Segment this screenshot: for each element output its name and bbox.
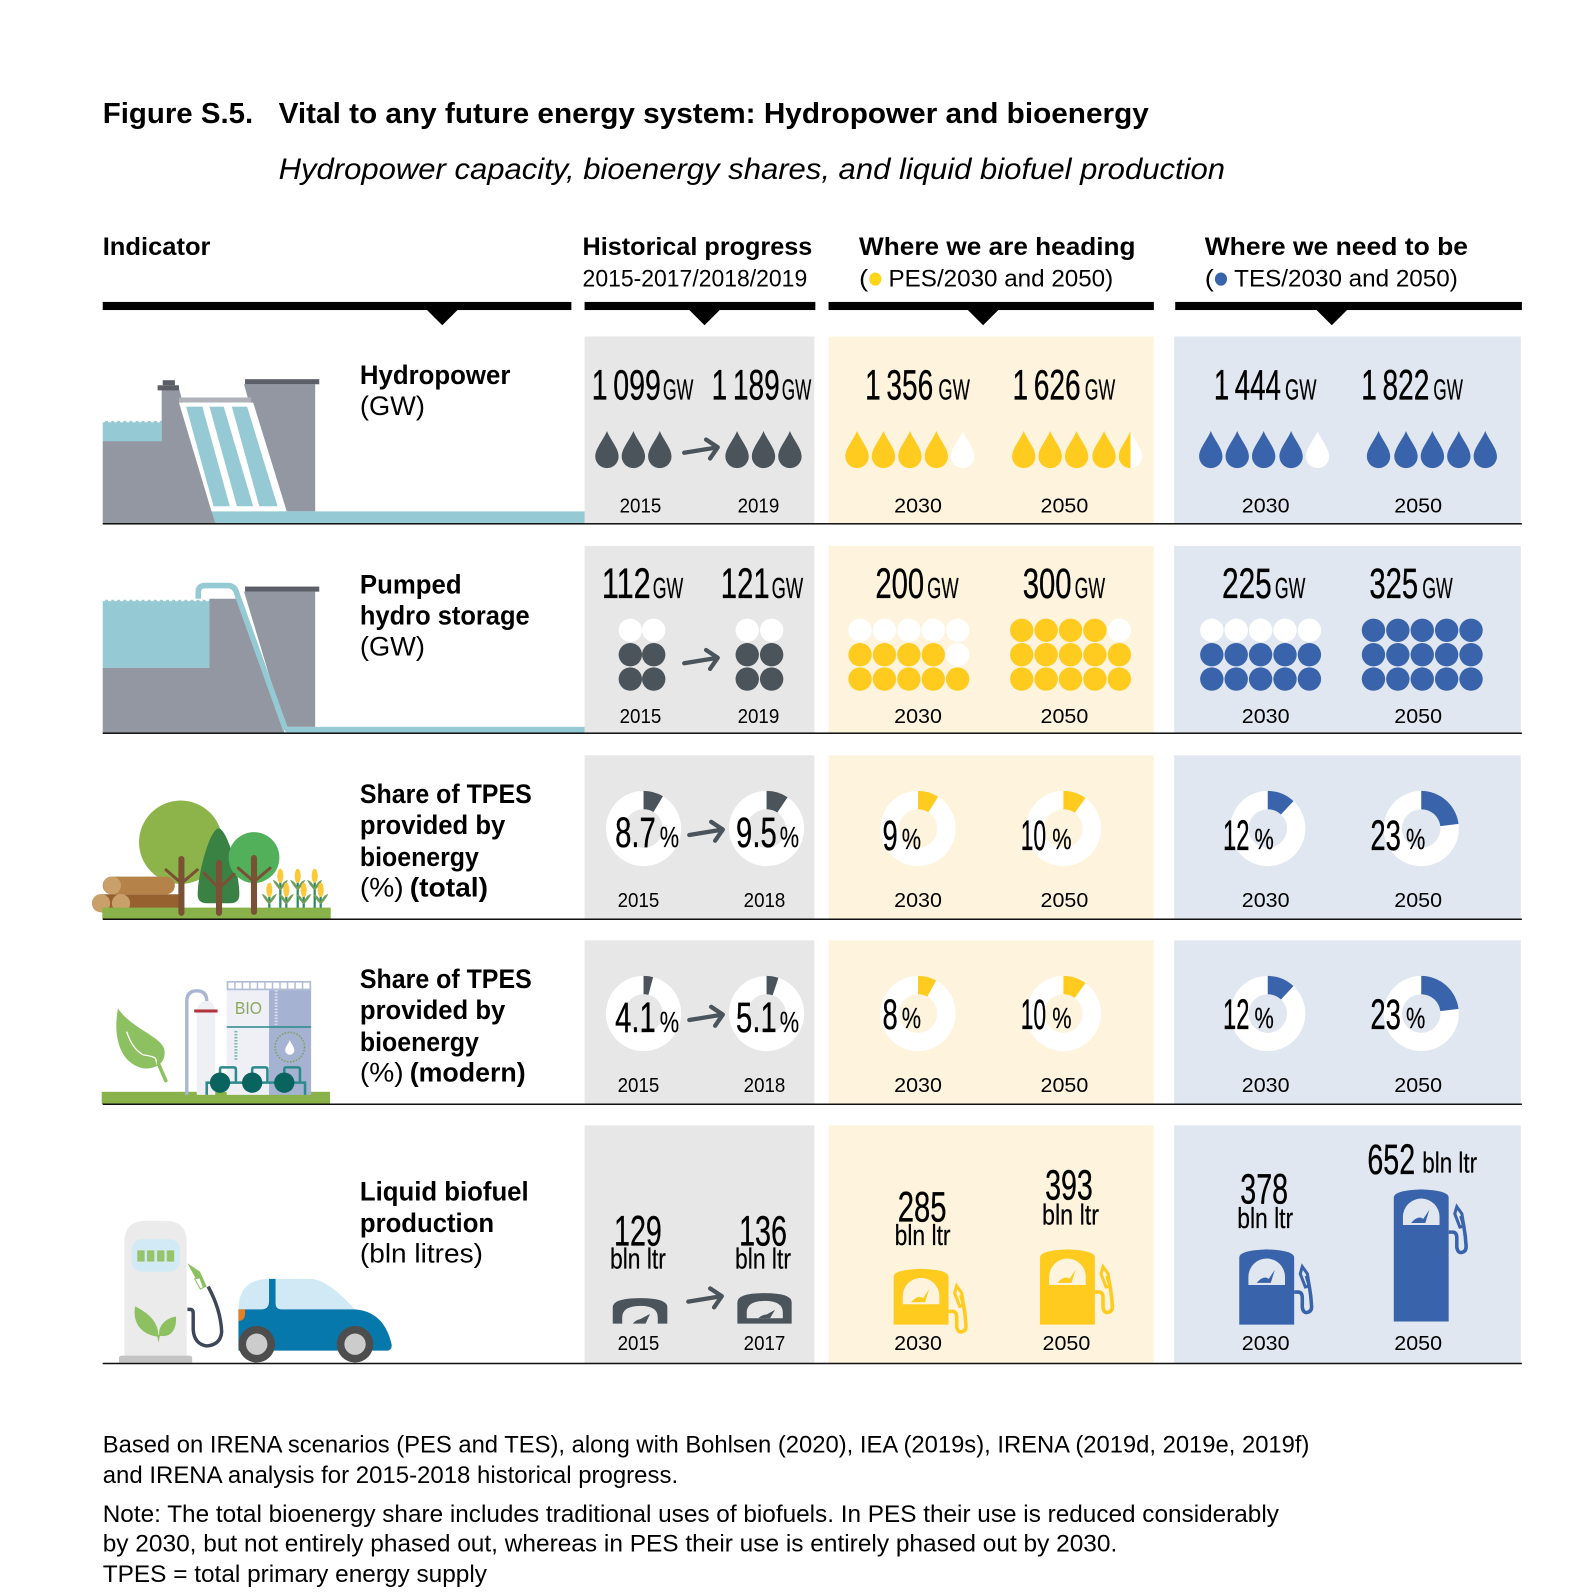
PES: 9 and 10 percent: %	[902, 824, 921, 856]
historical: 1099 to 1189 GW: 2019	[738, 495, 779, 517]
historical: 129 to 136 bln ltr: 2015	[618, 1333, 659, 1355]
column headers	[103, 233, 1468, 293]
historical: 4.1 to 5.1 percent: %	[780, 1007, 799, 1039]
column headers: (	[1205, 266, 1214, 293]
historical: 8.7 to 9.5 percent	[606, 791, 804, 912]
illustration: fuel pump and car	[119, 1221, 392, 1363]
PES: 285 and 393 bln ltr: 393	[1045, 1162, 1093, 1210]
PES: 200 and 300 GW: GW	[1075, 573, 1105, 605]
column headers: 2015-2017/2018/2019	[583, 266, 807, 293]
TES: 12 and 23 percent	[1223, 976, 1459, 1097]
PES: 1356 and 1626 GW: 1 356	[865, 362, 933, 410]
subtitle: Hydropower capacity, bioenergy shares, and liquid biofuel production	[279, 153, 1225, 186]
historical: 1099 to 1189 GW: 2015	[620, 495, 661, 517]
PES: 200 and 300 GW: GW	[927, 573, 959, 605]
historical: 129 to 136 bln ltr: bln ltr	[610, 1244, 666, 1276]
historical: 8.7 to 9.5 percent: 2018	[744, 890, 785, 912]
label: provided by	[360, 810, 506, 840]
historical: 8.7 to 9.5 percent: %	[780, 822, 799, 854]
historical: 112 to 121 GW: 121	[721, 560, 770, 608]
TES: 1444 and 1822 GW: 2030	[1242, 495, 1290, 517]
TES: 12 and 23 percent: 2030	[1242, 1075, 1290, 1097]
historical: 112 to 121 GW: 2019	[738, 706, 779, 728]
TES: 12 and 23 percent: %	[1255, 824, 1274, 856]
illustration: dam	[103, 379, 585, 524]
TES: 378 and 652 bln ltr	[1237, 1136, 1477, 1355]
historical: 112 to 121 GW: GW	[772, 573, 803, 605]
TES: 1444 and 1822 GW: 2050	[1394, 495, 1442, 517]
PES: 1356 and 1626 GW: GW	[1085, 375, 1115, 407]
PES: 9 and 10 percent: 2030	[894, 890, 942, 912]
historical: 1099 to 1189 GW: GW	[663, 375, 693, 407]
label	[360, 570, 530, 662]
column headers: TES/2030 and 2050)	[1234, 266, 1458, 293]
TES: 378 and 652 bln ltr: 2030	[1242, 1333, 1290, 1355]
historical: 8.7 to 9.5 percent: 8.7	[615, 809, 656, 857]
historical: 129 to 136 bln ltr: 2017	[744, 1333, 785, 1355]
title: Vital to any future energy system: Hydropower and bioenergy	[279, 98, 1149, 130]
PES: 8 and 10 percent: %	[1052, 1003, 1072, 1035]
column headers: Where we are heading	[859, 233, 1136, 261]
PES: 200 and 300 GW: 200	[875, 560, 924, 608]
TES: 225 and 325 GW: GW	[1422, 573, 1453, 605]
TES: 225 and 325 GW: 225	[1222, 560, 1272, 608]
historical: 4.1 to 5.1 percent: 2018	[744, 1075, 785, 1097]
title: Figure S.5.	[103, 98, 253, 130]
row: bioenergy share modern	[102, 964, 1459, 1104]
TES: 12 and 23 percent: %	[1406, 1003, 1425, 1035]
historical: 1099 to 1189 GW: 1 099	[592, 362, 661, 410]
historical: 1099 to 1189 GW: 1 189	[712, 362, 780, 410]
TES: 12 and 23 percent	[1223, 791, 1459, 912]
PES: 9 and 10 percent: 9	[882, 812, 898, 860]
PES: 285 and 393 bln ltr: 285	[898, 1183, 946, 1231]
historical: 8.7 to 9.5 percent: 2015	[618, 890, 659, 912]
footnotes: Based on IRENA scenarios (PES and TES), along with Bohlsen (2020), IEA (2019s), IRENA (2019d, 2019e, 2019f)	[103, 1432, 1309, 1459]
label: Hydropower	[360, 360, 510, 390]
footnotes: by 2030, but not entirely phased out, whereas in PES their use is entirely phased out by 2030.	[103, 1530, 1117, 1557]
TES: 225 and 325 GW: GW	[1275, 573, 1305, 605]
illustration: bio plant and leaf	[102, 982, 330, 1104]
TES: 225 and 325 GW: 325	[1369, 560, 1418, 608]
row: pumped hydro storage	[103, 560, 1483, 733]
column headers: PES/2030 and 2050)	[889, 266, 1113, 293]
label: (bln litres)	[360, 1239, 483, 1269]
label: Pumped	[360, 570, 462, 600]
TES: 378 and 652 bln ltr: 2050	[1394, 1333, 1442, 1355]
label: (GW)	[360, 632, 425, 662]
illustration: trees and logs	[92, 801, 331, 919]
historical: 129 to 136 bln ltr: bln ltr	[735, 1244, 791, 1276]
TES: 12 and 23 percent: 23	[1370, 812, 1401, 860]
PES: 8 and 10 percent: 2050	[1041, 1075, 1088, 1097]
TES: 12 and 23 percent: %	[1255, 1003, 1274, 1035]
PES: 8 and 10 percent	[880, 976, 1101, 1097]
TES: 378 and 652 bln ltr: bln ltr	[1422, 1148, 1477, 1180]
TES: 1444 and 1822 GW: 1 444	[1214, 362, 1281, 410]
TES: 12 and 23 percent: 2030	[1242, 890, 1290, 912]
historical: 4.1 to 5.1 percent: 2015	[618, 1075, 659, 1097]
PES: 1356 and 1626 GW: 2030	[894, 495, 942, 517]
label	[360, 360, 510, 421]
illustration: bio plant and leaf: BIO	[235, 998, 262, 1018]
label: bioenergy	[360, 842, 479, 872]
historical: 8.7 to 9.5 percent: %	[660, 822, 679, 854]
label	[360, 779, 532, 903]
label: Liquid biofuel	[360, 1177, 529, 1207]
TES: 12 and 23 percent: %	[1406, 824, 1425, 856]
PES: 1356 and 1626 GW: GW	[938, 375, 970, 407]
historical: 129 to 136 bln ltr: 129	[614, 1207, 662, 1255]
column headers: Historical progress	[583, 233, 812, 261]
PES: 285 and 393 bln ltr: bln ltr	[895, 1220, 951, 1252]
TES: 378 and 652 bln ltr: 652	[1367, 1136, 1415, 1184]
PES: 1356 and 1626 GW	[845, 362, 1142, 517]
label: (%)	[360, 873, 404, 903]
historical: 112 to 121 GW: 112	[602, 560, 651, 608]
TES: 225 and 325 GW: 2030	[1242, 706, 1290, 728]
PES: 200 and 300 GW	[848, 560, 1131, 728]
PES: 8 and 10 percent: 2030	[894, 1075, 942, 1097]
illustration: pumped storage	[103, 586, 585, 733]
PES: 8 and 10 percent: 10	[1021, 991, 1046, 1039]
column backgrounds	[585, 336, 1521, 1363]
label: Share of TPES	[360, 964, 532, 994]
label: bioenergy	[360, 1027, 479, 1057]
footnotes: TPES = total primary energy supply	[103, 1561, 487, 1588]
historical: 1099 to 1189 GW	[592, 362, 811, 517]
label: (total)	[410, 873, 488, 903]
TES: 1444 and 1822 GW: GW	[1433, 375, 1463, 407]
TES: 1444 and 1822 GW: GW	[1285, 375, 1317, 407]
historical: 112 to 121 GW: GW	[653, 573, 683, 605]
historical: 112 to 121 GW	[602, 560, 803, 728]
label	[360, 964, 532, 1088]
PES: 200 and 300 GW: 300	[1023, 560, 1072, 608]
label: (GW)	[360, 391, 425, 421]
label	[360, 1177, 529, 1269]
PES: 9 and 10 percent: 2050	[1041, 890, 1088, 912]
TES: 378 and 652 bln ltr: bln ltr	[1237, 1203, 1293, 1235]
label: (%)	[360, 1058, 404, 1088]
TES: 1444 and 1822 GW: 1 822	[1361, 362, 1429, 410]
TES: 225 and 325 GW	[1200, 560, 1483, 728]
footnotes	[103, 1432, 1309, 1588]
footnotes: and IRENA analysis for 2015-2018 historical progress.	[103, 1462, 678, 1489]
row: bioenergy share total	[92, 779, 1459, 919]
PES: 1356 and 1626 GW: 2050	[1041, 495, 1088, 517]
row: liquid biofuel	[119, 1136, 1477, 1363]
PES: 285 and 393 bln ltr: bln ltr	[1042, 1199, 1099, 1231]
TES: 12 and 23 percent: 2050	[1394, 1075, 1442, 1097]
TES: 12 and 23 percent: 2050	[1394, 890, 1442, 912]
PES: 200 and 300 GW: 2030	[894, 706, 942, 728]
column headers: Indicator	[103, 233, 211, 261]
TES: 1444 and 1822 GW	[1199, 362, 1497, 517]
header bars with pointers	[103, 302, 1522, 325]
historical: 129 to 136 bln ltr	[610, 1207, 792, 1355]
label: Share of TPES	[360, 779, 532, 809]
historical: 129 to 136 bln ltr: 136	[739, 1207, 787, 1255]
PES: 200 and 300 GW: 2050	[1041, 706, 1088, 728]
label: provided by	[360, 995, 506, 1025]
historical: 1099 to 1189 GW: GW	[782, 375, 811, 407]
PES: 8 and 10 percent: %	[902, 1003, 921, 1035]
column headers: (	[859, 266, 868, 293]
row: hydropower	[103, 360, 1497, 524]
PES: 285 and 393 bln ltr: 2030	[894, 1333, 942, 1355]
TES: 378 and 652 bln ltr: 378	[1240, 1166, 1288, 1214]
label: hydro storage	[360, 601, 530, 631]
label: production	[360, 1208, 494, 1238]
PES: 285 and 393 bln ltr: 2050	[1043, 1333, 1090, 1355]
historical: 4.1 to 5.1 percent: 5.1	[736, 994, 777, 1042]
historical: 112 to 121 GW: 2015	[620, 706, 661, 728]
label: (modern)	[410, 1058, 526, 1088]
TES: 12 and 23 percent: 23	[1370, 991, 1401, 1039]
PES: 9 and 10 percent: 10	[1021, 812, 1046, 860]
PES: 285 and 393 bln ltr	[894, 1162, 1112, 1355]
column headers: Where we need to be	[1205, 233, 1468, 261]
PES: 8 and 10 percent: 8	[882, 991, 898, 1039]
PES: 9 and 10 percent	[880, 791, 1101, 912]
historical: 4.1 to 5.1 percent: 4.1	[615, 994, 656, 1042]
footnotes: Note: The total bioenergy share includes traditional uses of biofuels. In PES their use is reduced considerably	[103, 1501, 1279, 1528]
TES: 12 and 23 percent: 12	[1223, 812, 1249, 860]
historical: 4.1 to 5.1 percent	[606, 976, 804, 1097]
PES: 9 and 10 percent: %	[1052, 824, 1072, 856]
historical: 4.1 to 5.1 percent: %	[660, 1007, 679, 1039]
historical: 8.7 to 9.5 percent: 9.5	[736, 809, 777, 857]
TES: 225 and 325 GW: 2050	[1394, 706, 1442, 728]
PES: 1356 and 1626 GW: 1 626	[1013, 362, 1081, 410]
TES: 12 and 23 percent: 12	[1223, 991, 1249, 1039]
